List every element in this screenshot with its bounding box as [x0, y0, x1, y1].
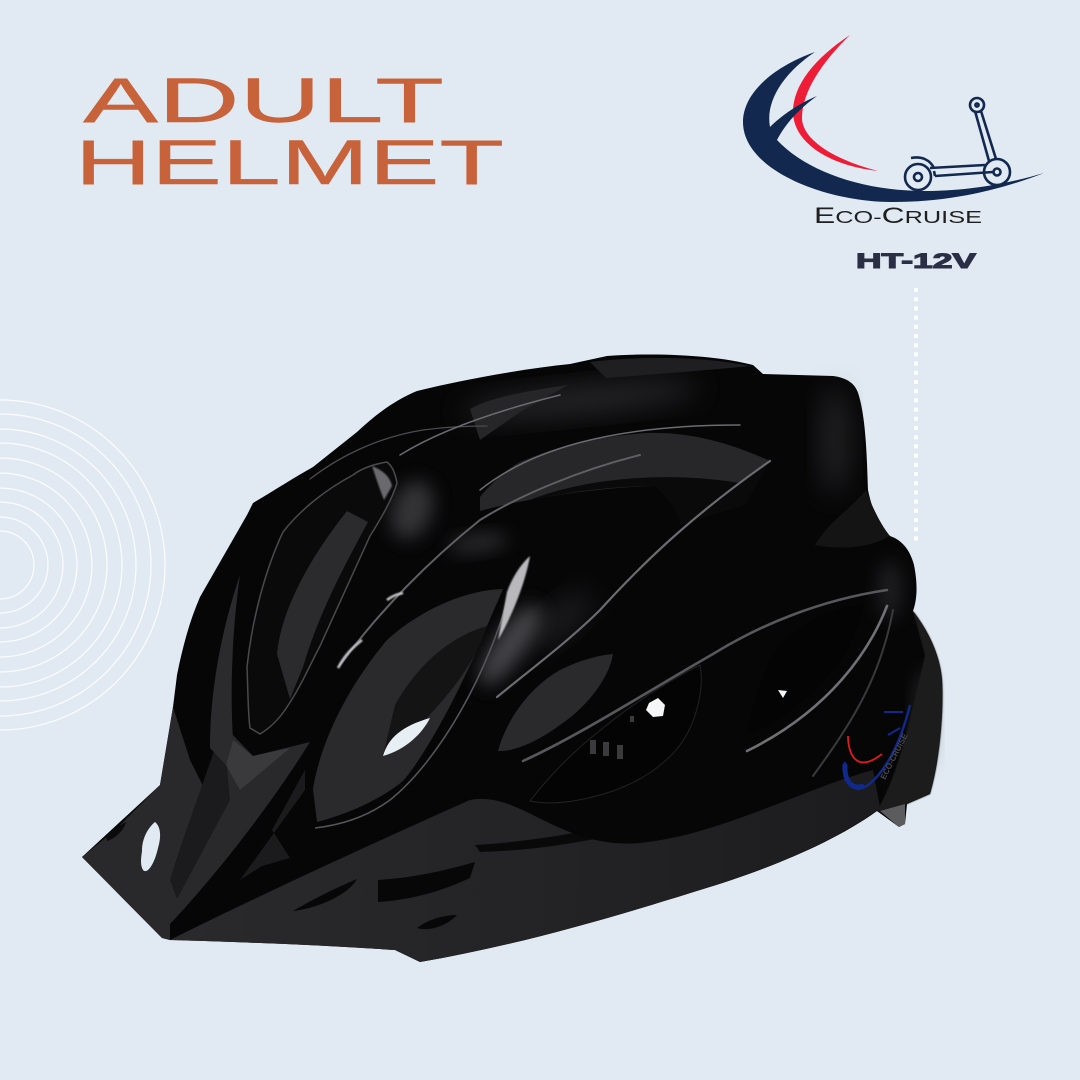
brand name: E CO- C RUISE — [814, 203, 982, 228]
lower band — [170, 770, 880, 962]
brand logo — [743, 35, 1044, 228]
visor holes — [141, 822, 160, 871]
vent mesh dots — [590, 716, 634, 759]
vent shadow — [383, 626, 487, 756]
vent foam: large center — [313, 589, 503, 822]
side vent white gap — [646, 698, 665, 717]
side vent rear — [747, 604, 863, 735]
vent cap highlight — [372, 466, 392, 500]
oval side panel — [498, 654, 613, 751]
ridge highlights — [310, 395, 893, 776]
logo swoosh: navy — [743, 52, 1044, 202]
model code: HT-12V — [856, 250, 976, 273]
rear pin — [880, 804, 905, 827]
top vent foam — [470, 358, 750, 440]
front band slots — [293, 790, 730, 929]
helmet side logo — [845, 705, 910, 789]
visor — [82, 707, 310, 940]
icon: scooter — [905, 98, 1010, 190]
top panel — [480, 433, 770, 511]
visor ridges — [170, 724, 305, 899]
helmet shell — [82, 354, 942, 962]
logo swoosh: red — [793, 35, 878, 171]
helmet — [82, 354, 942, 962]
rear shell panel — [877, 611, 942, 811]
concentric circles decoration — [0, 400, 165, 730]
bright highlight — [338, 593, 403, 668]
helmet side logo: ECO-CRUISE — [879, 731, 910, 781]
title: HELMET — [75, 128, 504, 198]
center vent rim — [315, 590, 510, 828]
specular tip — [498, 556, 530, 640]
title: ADULT — [83, 66, 444, 136]
vent foam: left central — [277, 511, 368, 699]
glossy reflections — [383, 374, 935, 770]
title — [75, 66, 504, 198]
dotted line — [914, 288, 918, 542]
vent: left central — [247, 462, 397, 734]
rear foam patch — [815, 490, 890, 548]
rear vent white gap — [778, 690, 787, 698]
vent opening — [383, 718, 430, 756]
vent foam: outer left — [210, 575, 240, 765]
top panel shade — [530, 461, 770, 525]
side vent front — [530, 665, 701, 803]
